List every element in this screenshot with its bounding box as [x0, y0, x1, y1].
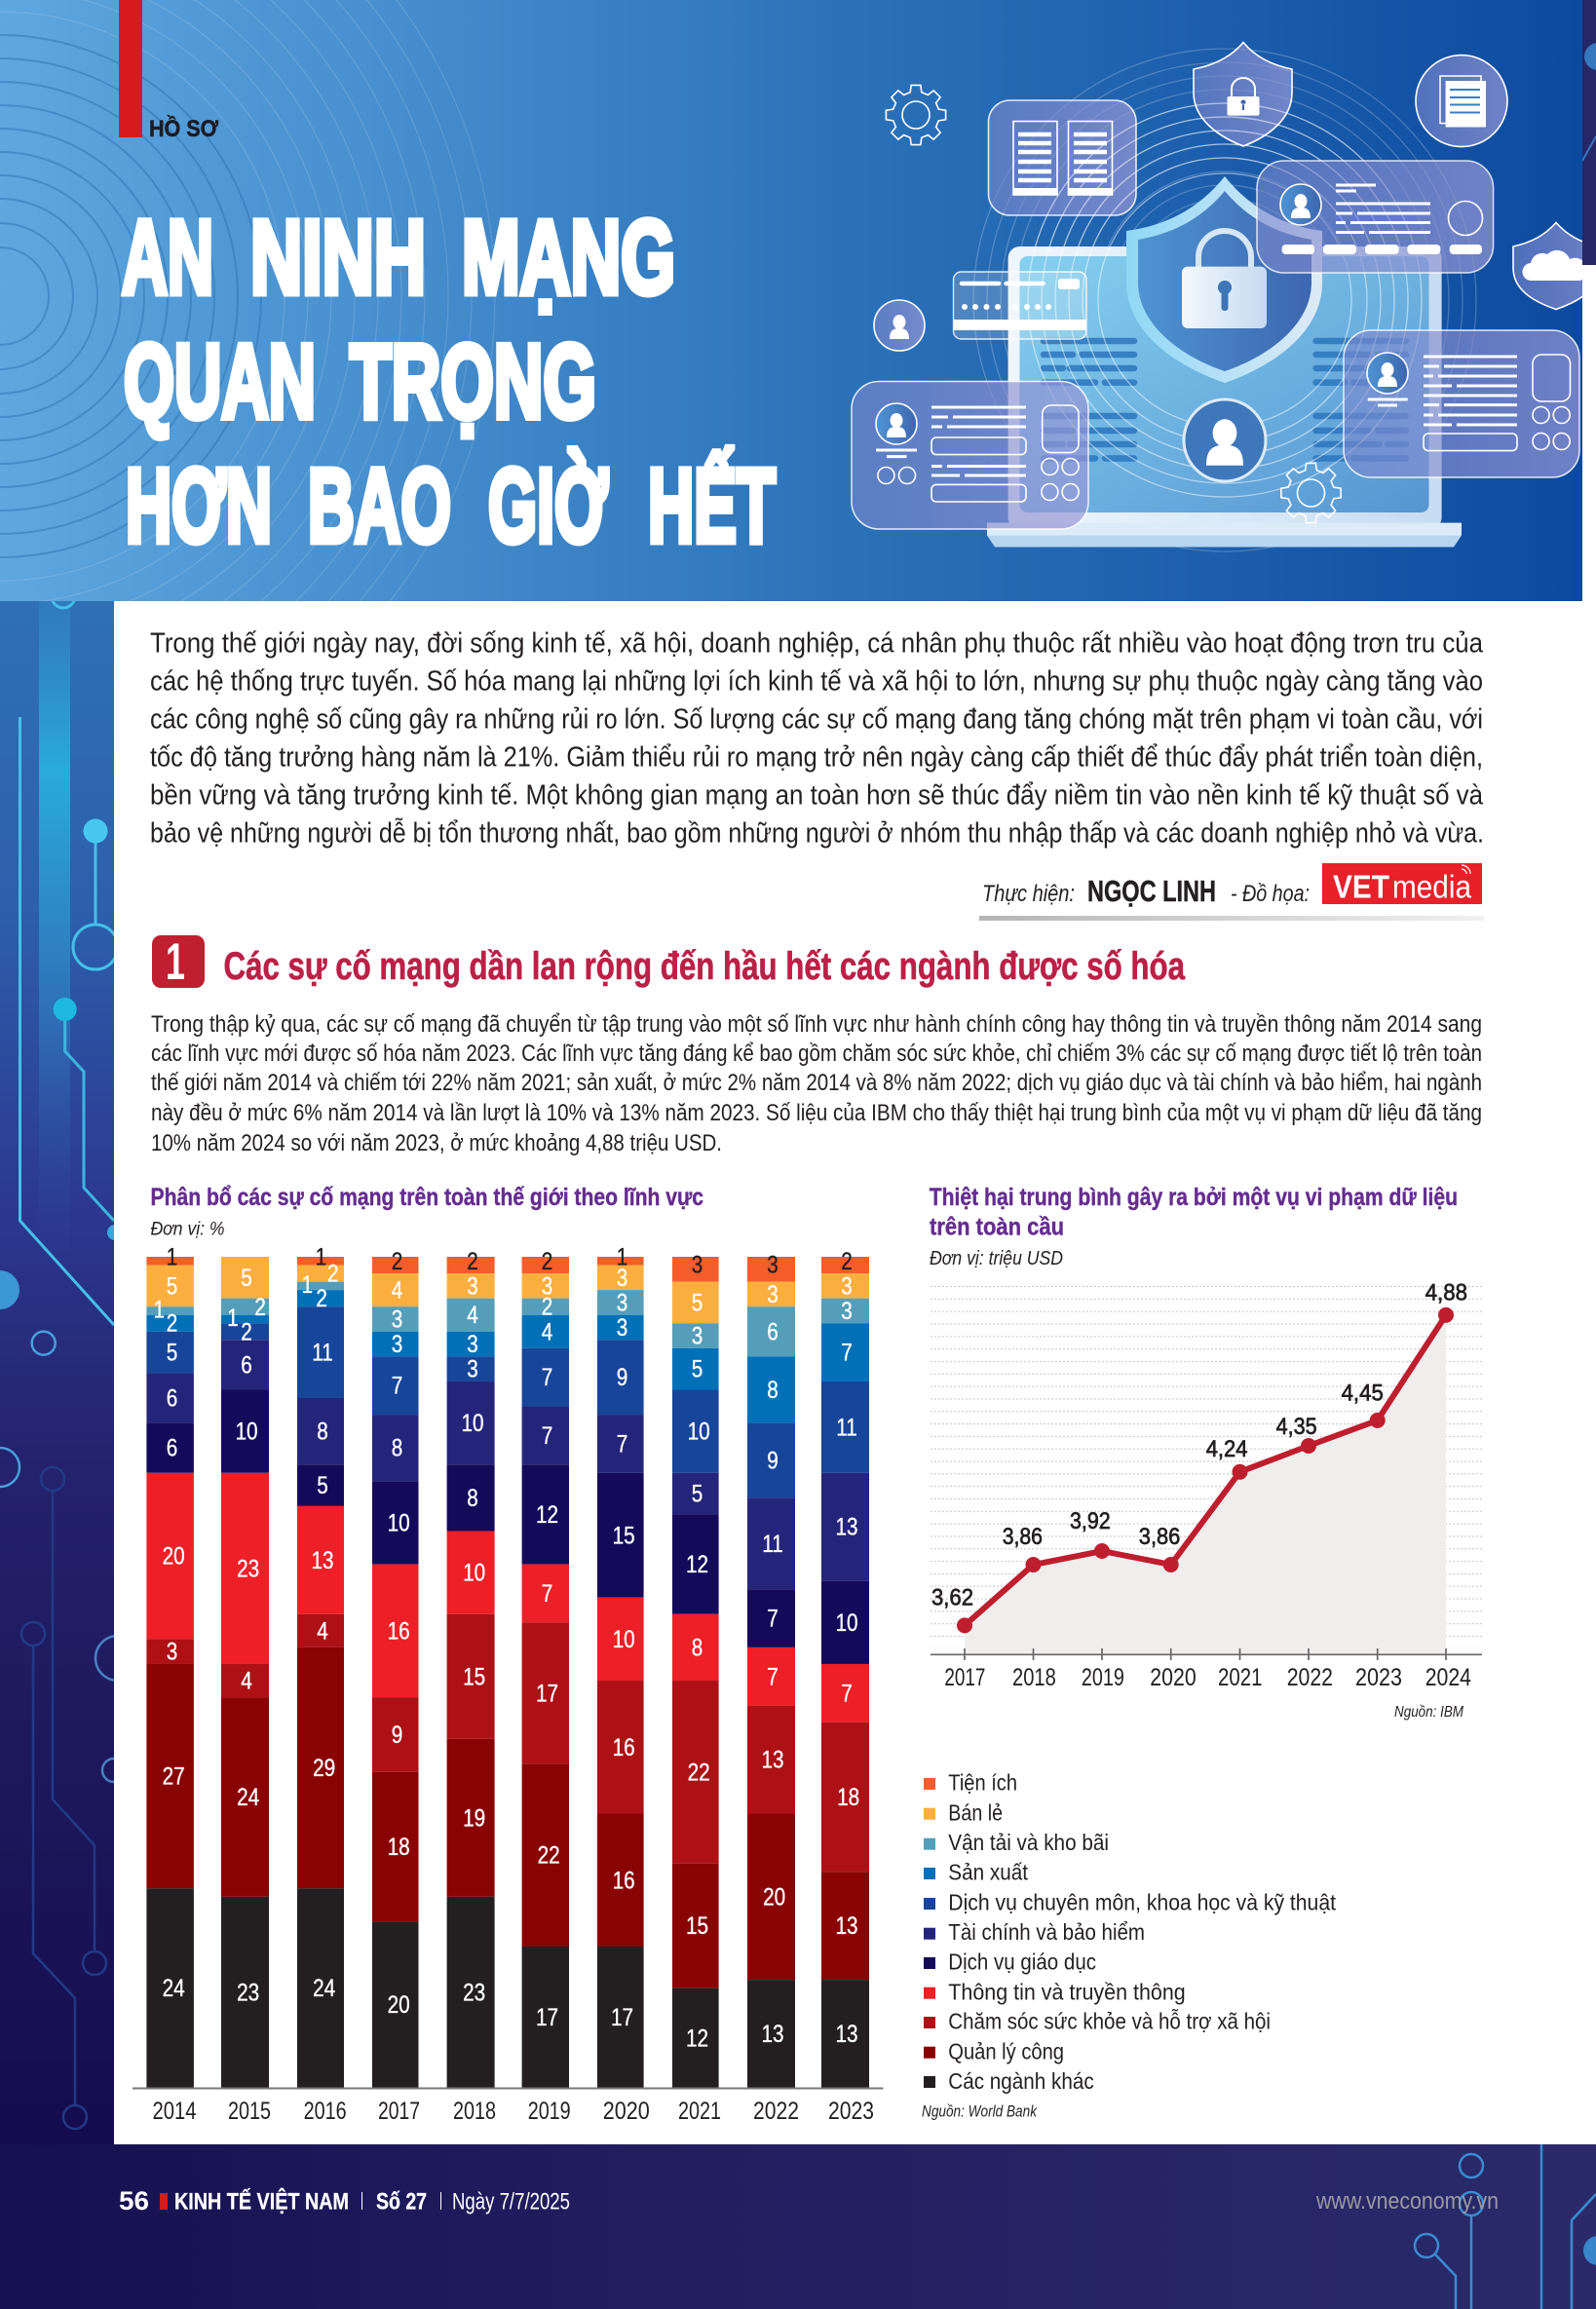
credits line: - Đồ họa: — [1231, 881, 1310, 907]
bar year labels: 2018 — [453, 2098, 496, 2125]
section paragraph: 10% năm 2024 so với năm 2023, ở mức khoảng 4,88 triệu USD. — [151, 1130, 722, 1156]
hero concentric rings — [0, 0, 495, 601]
logo: VETmedia: media — [1392, 869, 1472, 905]
bar value labels: 13 — [835, 1513, 858, 1540]
bar year labels: 2015 — [228, 2098, 271, 2125]
bar value labels: 23 — [463, 1979, 485, 2006]
footer publication line: Số 27 — [376, 2189, 427, 2215]
source: World Bank: Nguồn: World Bank — [922, 2102, 1038, 2121]
footer publication line — [160, 2188, 570, 2215]
hero illustration: security network — [852, 43, 1596, 551]
title: TRỌNG — [350, 322, 596, 439]
bar axis — [133, 2087, 883, 2089]
bar value labels: 6 — [767, 1317, 779, 1345]
bar value labels: 5 — [167, 1339, 177, 1366]
stacked bar chart — [133, 1243, 883, 2125]
illustration rings — [973, 49, 1476, 551]
bar value labels: 11 — [312, 1339, 333, 1366]
bar value labels: 8 — [692, 1634, 703, 1661]
credits line: NGỌC LINH — [1087, 874, 1216, 908]
bar value labels: 3 — [841, 1272, 853, 1300]
bar value labels: 1 — [316, 1243, 326, 1270]
line value labels: 4,45 — [1342, 1380, 1384, 1407]
bar value labels: 7 — [617, 1430, 627, 1457]
bar year labels: 2016 — [304, 2098, 347, 2125]
line year labels: 2024 — [1425, 1664, 1471, 1691]
bar value labels: 1 — [167, 1243, 177, 1270]
line year labels: 2019 — [1082, 1664, 1124, 1691]
bar value labels: 3 — [767, 1280, 779, 1307]
title: MẠNG — [462, 198, 675, 316]
legend: Sản xuất — [948, 1860, 1029, 1885]
card: profile top right — [1257, 161, 1494, 273]
section heading: Các sự cố mạng dần lan rộng đến hầu hết các ngành được số hóa — [224, 945, 1186, 988]
bar value labels: 15 — [686, 1912, 708, 1940]
bar value labels: 23 — [237, 1555, 259, 1582]
illustration: main shield with padlock — [1126, 176, 1322, 383]
bar value labels: 10 — [835, 1609, 858, 1636]
line year labels — [944, 1664, 1471, 1691]
bar value labels: 2 — [467, 1247, 478, 1274]
icon: lock shield small — [1194, 43, 1292, 146]
legend: Thông tin và truyền thông — [948, 1979, 1186, 2004]
bar year labels: 2014 — [152, 2098, 197, 2125]
line value labels: 4,35 — [1276, 1414, 1317, 1440]
bar value labels: 7 — [392, 1372, 402, 1399]
bar value labels: 8 — [392, 1434, 402, 1461]
bar value labels: 10 — [613, 1625, 635, 1652]
line year labels: 2020 — [1150, 1664, 1197, 1691]
bar value labels: 12 — [686, 1550, 708, 1578]
bar value labels: 24 — [163, 1974, 185, 2002]
line chart — [931, 1280, 1482, 1721]
icon: gear bottom — [1281, 463, 1341, 523]
line year labels: 2017 — [944, 1664, 985, 1691]
chart heading: line chart: Thiệt hại trung bình gây ra bởi một vụ vi phạm dữ liệu — [930, 1184, 1458, 1211]
credits line — [979, 863, 1484, 921]
bar value labels: 9 — [767, 1447, 779, 1474]
bar value labels: 17 — [611, 2003, 633, 2030]
legend: Vận tải và kho bãi — [948, 1830, 1109, 1855]
legend: Dịch vụ chuyên môn, khoa học và kỹ thuật — [948, 1889, 1337, 1914]
title: HƠN — [126, 446, 272, 564]
bar value labels: 7 — [542, 1363, 552, 1391]
bar year labels: 2021 — [678, 2098, 721, 2125]
title: NINH — [250, 198, 426, 316]
bar value labels: 24 — [237, 1783, 259, 1810]
bar value labels: 19 — [463, 1803, 485, 1832]
bar value labels: 18 — [837, 1783, 859, 1810]
legend: Bán lẻ — [948, 1799, 1003, 1825]
icon: server card — [988, 100, 1136, 215]
legend: Dịch vụ giáo dục — [948, 1949, 1096, 1975]
section number badge — [152, 933, 205, 991]
title: HẾT — [648, 446, 776, 564]
bar value labels: 10 — [235, 1418, 258, 1445]
bar value labels: 2 — [254, 1293, 266, 1320]
bar value labels: 15 — [613, 1521, 635, 1549]
bar value labels: 20 — [388, 1990, 410, 2019]
title — [122, 198, 776, 564]
card: profile bottom left — [852, 382, 1088, 529]
bar value labels: 2 — [392, 1247, 402, 1274]
section paragraph — [151, 1011, 1482, 1156]
icon: gear top — [886, 85, 946, 145]
bar value labels: 3 — [617, 1313, 627, 1341]
line value labels: 3,62 — [931, 1585, 973, 1611]
legend: Quản lý công — [948, 2038, 1064, 2063]
bar value labels: 2 — [841, 1247, 853, 1274]
bar value labels: 20 — [763, 1882, 785, 1911]
bar value labels: 13 — [835, 1912, 858, 1940]
legend: Tiện ích — [948, 1770, 1017, 1796]
section label: HỒ SƠ — [149, 115, 218, 142]
bar value labels: 17 — [536, 1679, 558, 1707]
line value labels: 3,86 — [1003, 1524, 1043, 1550]
icon: user circle centre — [1184, 399, 1266, 481]
bar value labels: 6 — [167, 1434, 177, 1461]
bar value labels: 5 — [167, 1272, 177, 1300]
illustration: payment card — [953, 272, 1086, 339]
bar value labels: 7 — [767, 1605, 779, 1632]
bar value labels: 1 — [617, 1243, 627, 1270]
bar value labels: 9 — [392, 1721, 402, 1748]
logo: VETmedia: VET — [1333, 869, 1389, 905]
bar value labels: 23 — [237, 1979, 259, 2006]
icon: red tab — [119, 0, 142, 137]
bar value labels: 3 — [467, 1272, 478, 1300]
line value labels: 4,88 — [1425, 1280, 1467, 1306]
bar value labels: 12 — [536, 1500, 558, 1528]
bar year labels — [152, 2098, 874, 2125]
bar value labels: 2 — [241, 1317, 252, 1345]
bar value labels: 3 — [617, 1264, 627, 1291]
footer website: www.vneconomy.vn — [1315, 2188, 1499, 2214]
bar value labels: 4 — [241, 1667, 252, 1694]
bar value labels: 1 — [301, 1270, 313, 1298]
bar value labels: 4 — [317, 1617, 328, 1645]
bar value labels: 12 — [686, 2024, 708, 2052]
logo: VETmedia — [1322, 863, 1482, 905]
title: QUAN — [124, 322, 316, 439]
bar value labels: 11 — [836, 1414, 857, 1441]
bar value labels: 3 — [841, 1297, 853, 1324]
footer publication line: Ngày 7/7/2025 — [452, 2189, 570, 2215]
bar value labels: 3 — [617, 1289, 627, 1316]
card: profile bottom right — [1344, 330, 1579, 477]
panel: hero banner — [0, 0, 1582, 601]
bar value labels — [153, 1243, 859, 2052]
line year labels: 2023 — [1355, 1664, 1402, 1691]
bar value labels: 8 — [317, 1418, 328, 1445]
section number badge: 1 — [166, 933, 185, 991]
bar value labels: 3 — [392, 1330, 402, 1358]
bar value labels: 9 — [617, 1363, 627, 1391]
bar value labels: 16 — [613, 1866, 635, 1894]
line year labels: 2022 — [1287, 1664, 1333, 1691]
bar value labels: 7 — [841, 1679, 853, 1707]
bar value labels: 4 — [542, 1317, 552, 1345]
bar value labels: 4 — [467, 1301, 478, 1329]
bar value labels: 18 — [388, 1833, 410, 1861]
bar value labels: 10 — [461, 1409, 484, 1437]
bar value labels: 3 — [392, 1306, 402, 1333]
legend: Tài chính và bảo hiểm — [948, 1919, 1145, 1945]
bar value labels: 13 — [835, 2020, 858, 2048]
title: BAO — [308, 446, 451, 564]
bar value labels: 2 — [542, 1247, 552, 1274]
panel: left circuit side band — [0, 601, 114, 2144]
bar value labels: 10 — [463, 1559, 485, 1586]
icon: document circle — [1416, 56, 1507, 147]
chart heading: line chart: Đơn vị: triệu USD — [930, 1248, 1063, 1269]
intro paragraph — [150, 627, 1484, 849]
illustration: laptop — [987, 103, 1462, 548]
bar value labels: 5 — [692, 1355, 703, 1382]
bar year labels: 2020 — [603, 2098, 650, 2125]
bar year labels: 2017 — [378, 2098, 420, 2125]
bar value labels: 8 — [467, 1484, 478, 1511]
bar value labels: 11 — [762, 1530, 783, 1557]
line value labels: 3,92 — [1070, 1508, 1111, 1534]
bar value labels: 16 — [388, 1617, 410, 1645]
source: IBM: Nguồn: IBM — [1394, 1704, 1464, 1721]
bar value labels: 3 — [692, 1322, 703, 1349]
legend — [924, 1770, 1337, 2094]
chart heading: stacked bars — [150, 1184, 703, 1240]
line value labels: 4,24 — [1206, 1436, 1247, 1462]
bar value labels: 10 — [388, 1509, 410, 1536]
bar value labels: 16 — [613, 1733, 635, 1760]
bar value labels: 7 — [841, 1339, 853, 1366]
footer publication line: KINH TẾ VIỆT NAM — [174, 2188, 349, 2215]
bar value labels: 24 — [313, 1974, 335, 2002]
bar value labels: 7 — [767, 1662, 779, 1690]
bar value labels: 13 — [311, 1546, 334, 1573]
footer page number: 56 — [119, 2186, 149, 2215]
bar value labels: 3 — [767, 1251, 779, 1278]
footer circuit decoration — [1415, 2144, 1596, 2309]
bar value labels: 3 — [467, 1330, 478, 1358]
bar value labels: 3 — [467, 1355, 478, 1382]
line year labels: 2018 — [1012, 1664, 1056, 1691]
title: GIỜ — [488, 446, 608, 564]
bar value labels: 2 — [327, 1260, 339, 1287]
title: AN — [122, 198, 213, 316]
bar value labels: 22 — [538, 1841, 560, 1869]
bar value labels: 1 — [153, 1296, 165, 1323]
bar value labels: 22 — [688, 1759, 710, 1786]
bar value labels: 5 — [241, 1264, 252, 1291]
bar value labels: 27 — [163, 1762, 185, 1790]
bar value labels: 7 — [542, 1579, 552, 1607]
bar value labels: 5 — [692, 1289, 703, 1316]
bar value labels: 13 — [761, 2020, 784, 2048]
footer band — [0, 2144, 1596, 2309]
bar value labels: 1 — [227, 1304, 239, 1331]
icon: cloud shield — [1512, 221, 1582, 310]
line axis and ticks — [931, 1648, 1482, 1660]
bar value labels: 17 — [536, 2003, 558, 2030]
bar value labels: 6 — [241, 1351, 252, 1379]
bar year labels: 2023 — [828, 2098, 874, 2125]
bar value labels: 10 — [688, 1418, 710, 1445]
bar year labels: 2022 — [753, 2098, 799, 2125]
bars — [146, 1257, 869, 2088]
bar value labels: 4 — [392, 1276, 402, 1304]
area under line — [965, 1315, 1446, 1654]
chart heading: stacked bars: Đơn vị: % — [150, 1220, 225, 1240]
bar year labels: 2019 — [528, 2098, 571, 2125]
bar value labels: 6 — [167, 1384, 177, 1412]
bar value labels: 2 — [542, 1293, 552, 1320]
line year labels: 2021 — [1218, 1664, 1263, 1691]
bar value labels: 5 — [692, 1480, 703, 1507]
bar value labels: 2 — [316, 1284, 327, 1312]
bar value labels: 3 — [692, 1251, 703, 1278]
chart heading: line chart: trên toàn cầu — [930, 1214, 1064, 1241]
legend: Chăm sóc sức khỏe và hỗ trợ xã hội — [948, 2009, 1271, 2034]
line value labels — [931, 1280, 1467, 1611]
line value labels: 3,86 — [1139, 1524, 1180, 1550]
panel: top-right navy strip — [1582, 0, 1596, 265]
bar value labels: 29 — [313, 1754, 335, 1782]
bar value labels: 15 — [463, 1662, 485, 1690]
bar value labels: 3 — [542, 1272, 552, 1300]
icon: user circle left — [874, 300, 925, 351]
bar value labels: 5 — [317, 1471, 328, 1499]
chart heading: stacked bars: Phân bổ các sự cố mạng trên toàn thế giới theo lĩnh vực — [150, 1184, 703, 1211]
bar value labels: 8 — [767, 1376, 779, 1403]
data line — [957, 1307, 1454, 1633]
bar value labels: 3 — [167, 1638, 177, 1665]
bar value labels: 13 — [761, 1746, 784, 1773]
legend: Các ngành khác — [948, 2068, 1094, 2094]
chart heading: line chart — [930, 1184, 1458, 1269]
bar value labels: 20 — [163, 1542, 185, 1570]
credits line: Thực hiện: — [982, 881, 1075, 907]
bar value labels: 7 — [542, 1421, 552, 1449]
bar value labels: 2 — [167, 1309, 177, 1337]
